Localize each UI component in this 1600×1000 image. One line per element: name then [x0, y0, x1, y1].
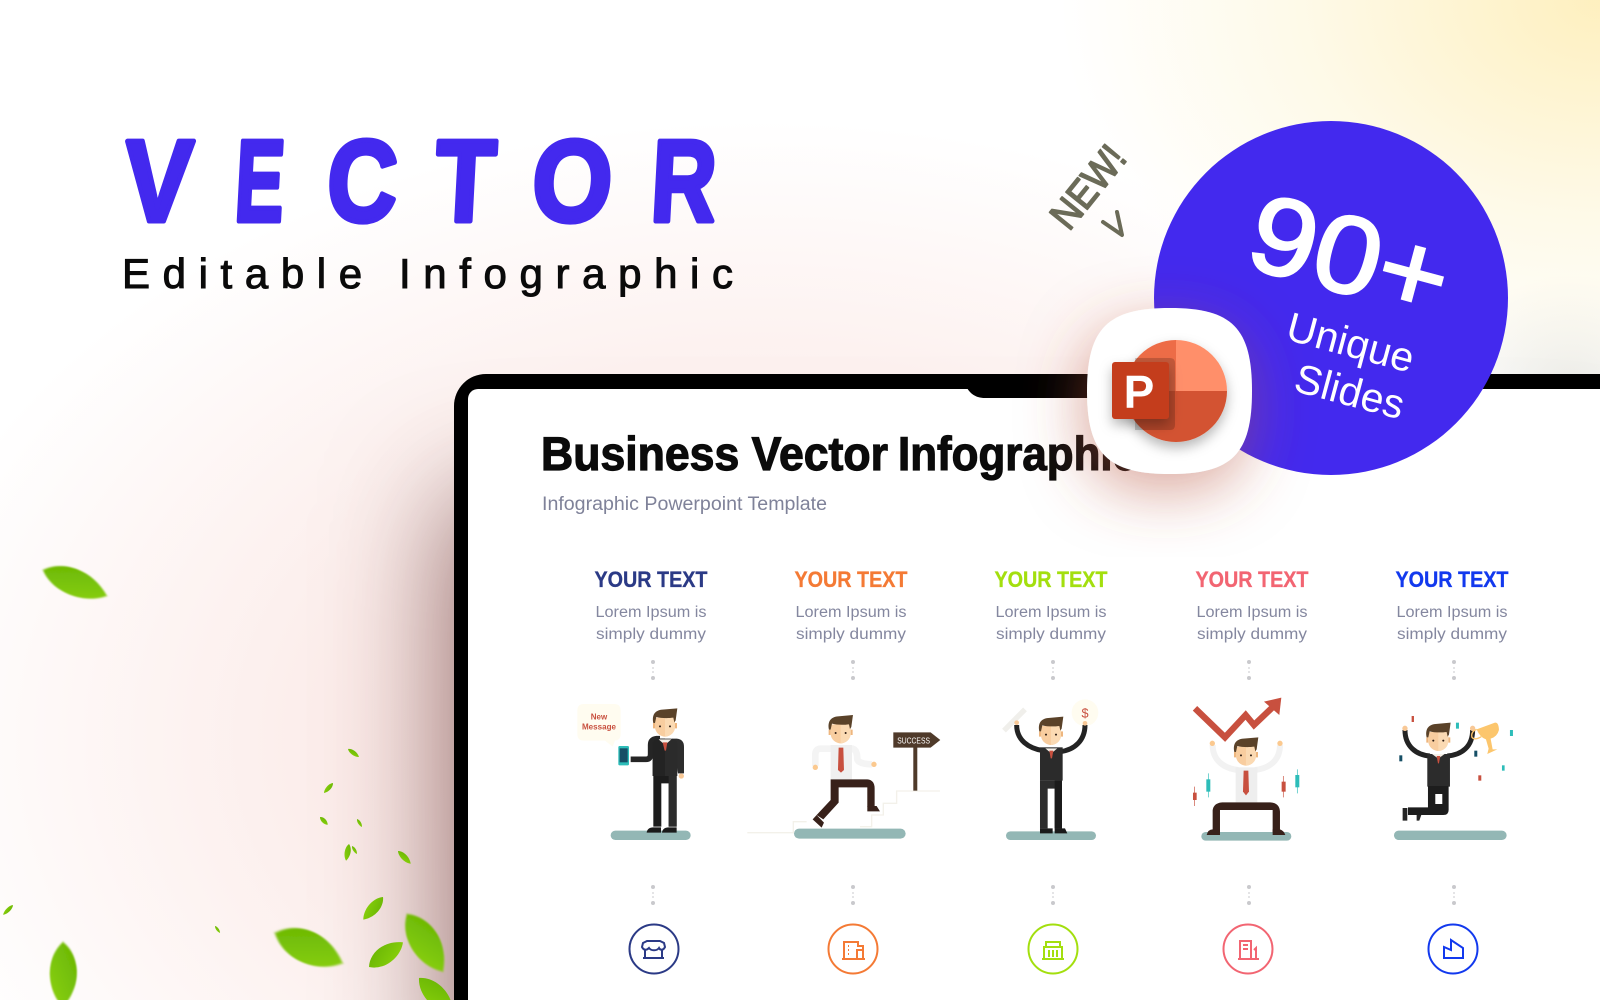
figure 1: businessman with phone: New [591, 712, 608, 721]
heading: VECTOR [121, 116, 720, 246]
heading: VECTOR: E [232, 116, 288, 246]
heading: VECTOR: V [121, 116, 196, 246]
icon: bank green [1028, 924, 1078, 974]
icon: factory blue [1428, 924, 1478, 974]
NEW! handwritten note: NEW! [1042, 137, 1135, 238]
column 1 text [594, 567, 708, 643]
slide subtitle: Infographic Powerpoint Template [542, 494, 827, 515]
bottom connector dots [651, 885, 1456, 905]
column 1 text: simply dummy [596, 626, 706, 643]
slide title [541, 427, 1137, 480]
column 4 text: simply dummy [1197, 626, 1307, 643]
column 2 text: Lorem Ipsum is [796, 604, 907, 621]
column 1 text: Lorem Ipsum is [596, 604, 707, 621]
subheading: Editable Infographic [122, 250, 733, 297]
heading: VECTOR: T [432, 116, 499, 246]
figure 2: businessman running to success [747, 715, 940, 839]
column 4 text [1196, 567, 1309, 643]
icon: store [630, 924, 678, 974]
leaves [2, 557, 461, 1000]
figure 5: businessman jumping with trophy [1394, 716, 1513, 840]
icon: PowerPoint app tile [1087, 308, 1252, 474]
column 3 text [994, 567, 1108, 643]
badge: 90+ unique slides [1154, 121, 1508, 475]
figure 1: businessman with phone: Message [582, 722, 617, 731]
device frame [454, 374, 1600, 1000]
icon: office building red [1224, 924, 1272, 974]
column 2 text: simply dummy [796, 626, 906, 643]
icon: PowerPoint app tile: P [1124, 366, 1154, 418]
badge: 90+ unique slides: Unique [1282, 303, 1419, 382]
top connector dots [651, 660, 1456, 680]
icon: office building orange [828, 924, 878, 974]
column 3 text: simply dummy [996, 626, 1106, 643]
column 5 text: simply dummy [1397, 626, 1507, 643]
heading: VECTOR: R [648, 116, 720, 246]
column 4 text: Lorem Ipsum is [1196, 604, 1308, 621]
badge: 90+ unique slides: Slides [1290, 355, 1410, 428]
badge: 90+ unique slides: 90+ [1236, 170, 1463, 341]
column 5 text: Lorem Ipsum is [1396, 604, 1508, 621]
column 2 text: YOUR TEXT [794, 567, 908, 592]
slide title: Infographic [898, 427, 1137, 480]
column 3 text: YOUR TEXT [994, 567, 1108, 592]
column 5 text: YOUR TEXT [1396, 567, 1509, 592]
figure 3: businessman with hands raised [1004, 699, 1098, 840]
column 3 text: Lorem Ipsum is [996, 604, 1107, 621]
figure 4: businessman with rising arrow [1193, 698, 1299, 841]
column 4 text: YOUR TEXT [1196, 567, 1309, 592]
notch [967, 388, 1120, 398]
column 5 text [1396, 567, 1509, 643]
heading: VECTOR: O [529, 116, 616, 246]
slide title: Business Vector [541, 427, 888, 480]
figure 2: businessman running to success: SUCCESS [897, 736, 930, 745]
figure 3: businessman with hands raised: $ [1081, 706, 1089, 720]
heading: VECTOR: C [324, 116, 401, 246]
figure 1: businessman with phone [577, 704, 691, 840]
column 2 text [794, 567, 908, 643]
column 1 text: YOUR TEXT [594, 567, 708, 592]
